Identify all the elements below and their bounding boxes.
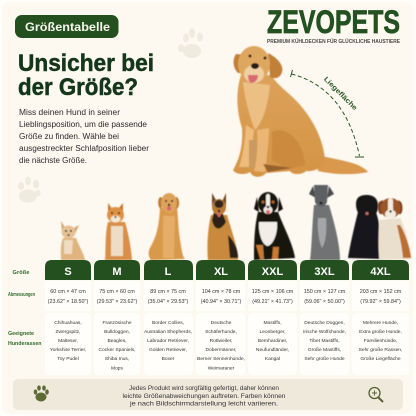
dog: golden retriever small xyxy=(149,193,185,260)
column XXL: XXL xyxy=(262,266,283,278)
column L: 89 cm × 75 cm xyxy=(150,289,186,295)
dog: saint bernard xyxy=(378,198,411,260)
footer text: je nach Bildschirmdarstellung leicht variieren. xyxy=(129,400,278,408)
column 4XL: Extra große Hunde, xyxy=(359,329,402,335)
badge: Größentabelle: Größentabelle xyxy=(25,20,110,34)
row label: Geeignete Hunderassen: Hunderassen xyxy=(8,341,42,347)
column L: L xyxy=(165,266,172,278)
column 4XL: Sehr große Rassen, xyxy=(359,347,402,353)
column XL: XL xyxy=(214,266,228,278)
column L: Golden Retriever, xyxy=(149,347,187,353)
column XXL: Mastiffs, xyxy=(263,320,282,326)
column 3XL: 3XL xyxy=(314,266,335,278)
column S: Chihuahuas, xyxy=(54,320,82,326)
column L: Labrador Retriever, xyxy=(147,338,189,344)
column S: Toy Pudel xyxy=(57,356,79,362)
dog: newfoundland xyxy=(348,195,383,259)
footer text xyxy=(122,385,286,408)
column XL: Weimaraner xyxy=(208,366,235,372)
column XXL xyxy=(248,260,297,375)
column S xyxy=(45,260,91,375)
body text: Miss deinen Hund in seiner xyxy=(19,108,120,117)
row label: Abmessungen: Abmessungen xyxy=(8,292,35,298)
column S: Yorkshire Terrier, xyxy=(50,347,86,353)
title: Unsicher bei xyxy=(18,50,154,77)
column S: Zwergspitz, xyxy=(55,329,81,335)
column 3XL: 150 cm × 127 cm xyxy=(304,289,346,295)
body text: die nächste Größe. xyxy=(19,156,87,165)
column S: (23.62" × 18.50") xyxy=(48,299,88,305)
title: der Größe? xyxy=(18,74,138,101)
column L: Boxer xyxy=(162,356,175,362)
column XL: Schäferhunde, xyxy=(205,329,237,335)
column XL: 104 cm × 78 cm xyxy=(202,289,241,295)
column 3XL: Tibet Mastiffs, xyxy=(309,338,340,344)
footer text: Jedes Produkt wird sorgfältig gefertigt, daher können xyxy=(129,385,280,392)
column M: Mops xyxy=(111,366,124,372)
row label: Geeignete Hunderassen: Geeignete xyxy=(8,331,34,337)
dog: shiba xyxy=(105,203,132,260)
column XXL: Leonberger, xyxy=(259,329,286,335)
column 3XL: Deutsche Doggen, xyxy=(304,320,345,326)
body text: ausgestreckter Schlafposition lieber xyxy=(19,144,149,153)
column XXL: Bernhardiner, xyxy=(258,338,287,344)
column M: M xyxy=(112,266,122,278)
large golden retriever xyxy=(233,46,368,177)
lying area arc: Liegefläche: Liegefläche xyxy=(322,76,358,112)
column 3XL: Große Mastiffs, xyxy=(308,347,341,353)
column 4XL: (79.92" × 59.84") xyxy=(360,299,401,305)
column M: Shiba Inus, xyxy=(105,356,129,362)
decorative paw left xyxy=(18,176,40,202)
badge: Größentabelle xyxy=(15,15,118,38)
column L: Border Collies, xyxy=(152,320,184,326)
column M: Cocker Spaniels, xyxy=(99,347,135,353)
column XXL: Neufundländer, xyxy=(256,347,289,353)
icon: paw xyxy=(34,385,49,402)
lying area arc: Liegefläche xyxy=(290,70,364,157)
column 4XL: 203 cm × 152 cm xyxy=(360,289,402,295)
column XXL: 125 cm × 106 cm xyxy=(252,289,294,295)
footer text: leichte Größenabweichungen auftreten. Farben können xyxy=(122,393,286,400)
column S: 60 cm × 47 cm xyxy=(50,289,86,295)
column L: (35.04" × 29.53") xyxy=(148,299,188,305)
column 3XL xyxy=(300,260,349,375)
column XL: Deutsche xyxy=(211,320,232,326)
column 3XL: Irische Wolfshunde, xyxy=(303,329,346,335)
body text: Größe zu finden. Wähle bei xyxy=(19,132,119,141)
column M: Beagles, xyxy=(107,338,127,344)
column XL: (40.94" × 30.71") xyxy=(201,299,241,305)
column M: Französische xyxy=(102,320,132,326)
dog: chihuahua xyxy=(61,221,85,260)
column M xyxy=(94,260,140,375)
column XXL: Kangal xyxy=(265,356,280,362)
column XXL: (49.21" × 41.73") xyxy=(252,299,293,305)
column S: S xyxy=(64,266,72,278)
column L: Australian Shepherds, xyxy=(144,329,192,335)
column 4XL: Große Liegefläche xyxy=(360,356,401,362)
brand logo: PREMIUM KÜHLDECKEN FÜR GLÜCKLICHE HAUSTIERE xyxy=(267,38,401,45)
title xyxy=(18,50,154,101)
dog: bernese mountain dog xyxy=(254,192,295,260)
body text: Lieblingsposition, um die passende xyxy=(19,120,148,129)
row label: Größe: Größe xyxy=(12,270,30,276)
column L xyxy=(144,260,193,375)
icon: magnifier xyxy=(369,388,383,402)
column XL: Berner Sennenhunde, xyxy=(197,356,245,362)
column M: 75 cm × 60 cm xyxy=(99,289,135,295)
row label: Geeignete Hunderassen xyxy=(8,331,42,347)
column 4XL: Mehrere Hunde, xyxy=(363,320,398,326)
column 3XL: Sehr große Hunde xyxy=(304,356,345,362)
column M: Bulldoggen, xyxy=(104,329,130,335)
column 3XL: (59.06" × 50.00") xyxy=(304,299,345,305)
column S: Malteser, xyxy=(58,338,78,344)
body text xyxy=(19,108,149,165)
column M: (29.53" × 23.62") xyxy=(97,299,137,305)
dog: german shepherd xyxy=(207,193,238,260)
column XL: Dobermänner, xyxy=(206,347,236,353)
footer note bar xyxy=(13,379,403,410)
column XL xyxy=(196,260,245,375)
column XL: Rottweiler, xyxy=(210,338,232,344)
column 4XL: Familienhunde, xyxy=(364,338,397,344)
column 4XL: 4XL xyxy=(370,266,391,278)
decorative paw top xyxy=(178,28,203,58)
dog: great dane xyxy=(309,185,340,260)
column 4XL xyxy=(352,260,409,375)
